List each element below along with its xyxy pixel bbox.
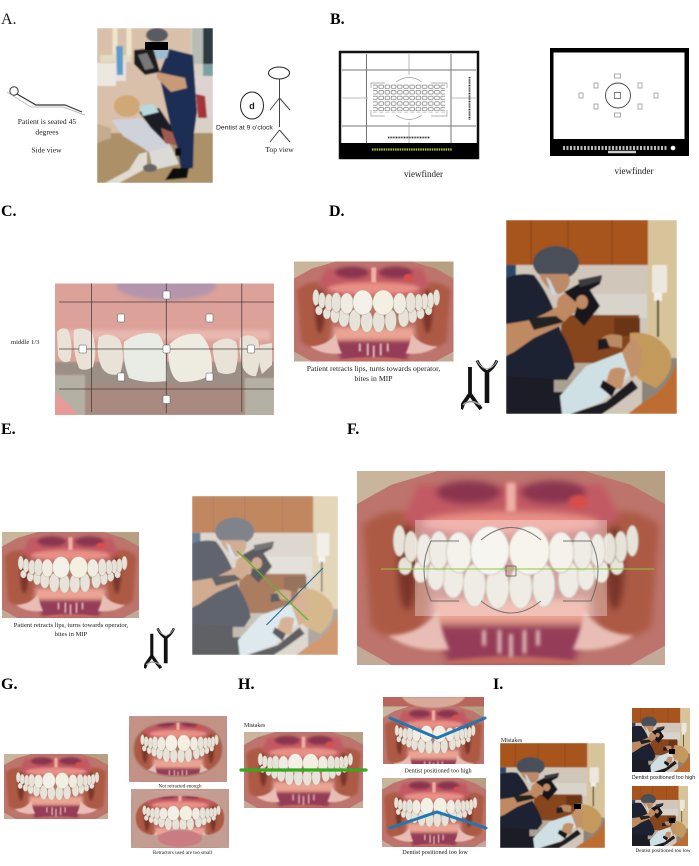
text: viewfinder label 2: viewfinder xyxy=(615,166,653,176)
text: mistakes: Mistakes xyxy=(501,738,523,744)
heading C: C. xyxy=(1,203,17,220)
heading F: F. xyxy=(347,421,359,438)
text: middle third: middle 1/3 xyxy=(11,339,40,346)
caption: Dentist positioned too low xyxy=(402,849,468,856)
text: top view: Top view xyxy=(265,145,294,154)
photo: operator with alignment lines xyxy=(192,496,338,655)
panel A: patient and dentist positioning xyxy=(1,11,294,183)
photo: retractors too small xyxy=(131,789,229,848)
panel B: viewfinder diagrams xyxy=(330,11,689,179)
blue facial plane line xyxy=(266,568,323,625)
panel D: patient retracts lips xyxy=(294,203,677,414)
caption E: bites in MIP xyxy=(55,631,88,638)
heading G: G. xyxy=(1,676,17,693)
panel F: framing on smile xyxy=(347,421,665,665)
photo: not retracted enough xyxy=(129,716,227,782)
heading I: I. xyxy=(493,676,503,693)
photo: dentist too low xyxy=(382,778,486,847)
text: patient seated: degrees xyxy=(35,128,59,136)
panel I: operator height mistakes xyxy=(493,676,695,854)
icon: lip retractors xyxy=(461,360,497,409)
photo: correct retraction xyxy=(4,754,108,819)
panel E: camera and patient alignment xyxy=(1,421,338,668)
heading B: B. xyxy=(330,11,345,28)
panel C: grid composition over smile xyxy=(1,203,275,415)
icon: lip retractors xyxy=(144,628,174,668)
green camera axis line xyxy=(237,551,308,620)
caption D: bites in MIP xyxy=(354,374,393,383)
translucent viewfinder overlay xyxy=(415,520,607,616)
photo: retracted smile with overlay xyxy=(357,471,665,665)
photo: correct level with green line xyxy=(241,732,366,808)
viewfinder diagram 1 xyxy=(340,52,478,159)
panel G: retraction mistakes xyxy=(1,676,229,856)
panel H: camera height mistakes xyxy=(238,676,486,856)
text: patient seated: Side view xyxy=(31,146,62,154)
grid lines xyxy=(59,283,275,413)
text: patient seated: Patient is seated 45 xyxy=(18,117,76,126)
photo: smile with grid and focus points xyxy=(55,272,275,415)
caption: Dentist positioned too high xyxy=(404,768,473,774)
text: mistakes: Mistakes xyxy=(244,723,266,729)
green horizontal line xyxy=(381,568,654,570)
photo: operator photographing patient xyxy=(506,220,677,414)
caption: Dentist positioned too high xyxy=(632,775,695,781)
viewfinder brackets xyxy=(424,528,598,613)
photo: dentist too low xyxy=(632,786,688,846)
text: d: d xyxy=(249,101,255,111)
focus points xyxy=(79,291,254,404)
viewfinder diagram 2 xyxy=(550,48,689,156)
photo: dentist too high xyxy=(383,697,485,773)
caption E: Patient retracts lips, turns towards operator, xyxy=(14,622,128,629)
heading H: H. xyxy=(238,676,254,693)
privacy bar xyxy=(145,42,168,50)
photo: dentist too high xyxy=(632,708,690,772)
text: dentist position: Dentist at 9 o'clock xyxy=(216,124,273,132)
caption D: Patient retracts lips, turns towards operator, xyxy=(307,364,440,373)
heading D: D. xyxy=(329,203,345,220)
photo: retracted smile xyxy=(2,532,139,618)
caption: Retractors used are too small xyxy=(153,850,213,856)
photo: retracted smile xyxy=(294,262,454,362)
heading E: E. xyxy=(1,421,16,438)
icon: stick figure top view with dentist xyxy=(240,67,290,142)
photo: operator and patient xyxy=(500,743,605,848)
caption: Dentist positioned too low xyxy=(636,848,691,854)
icon: patient seated side view xyxy=(7,87,85,115)
text: viewfinder label 1: viewfinder xyxy=(404,169,443,179)
caption: Not retracted enough xyxy=(158,784,202,790)
photo: dentist standing over reclined patient xyxy=(97,28,213,183)
heading A: A. xyxy=(1,11,17,28)
